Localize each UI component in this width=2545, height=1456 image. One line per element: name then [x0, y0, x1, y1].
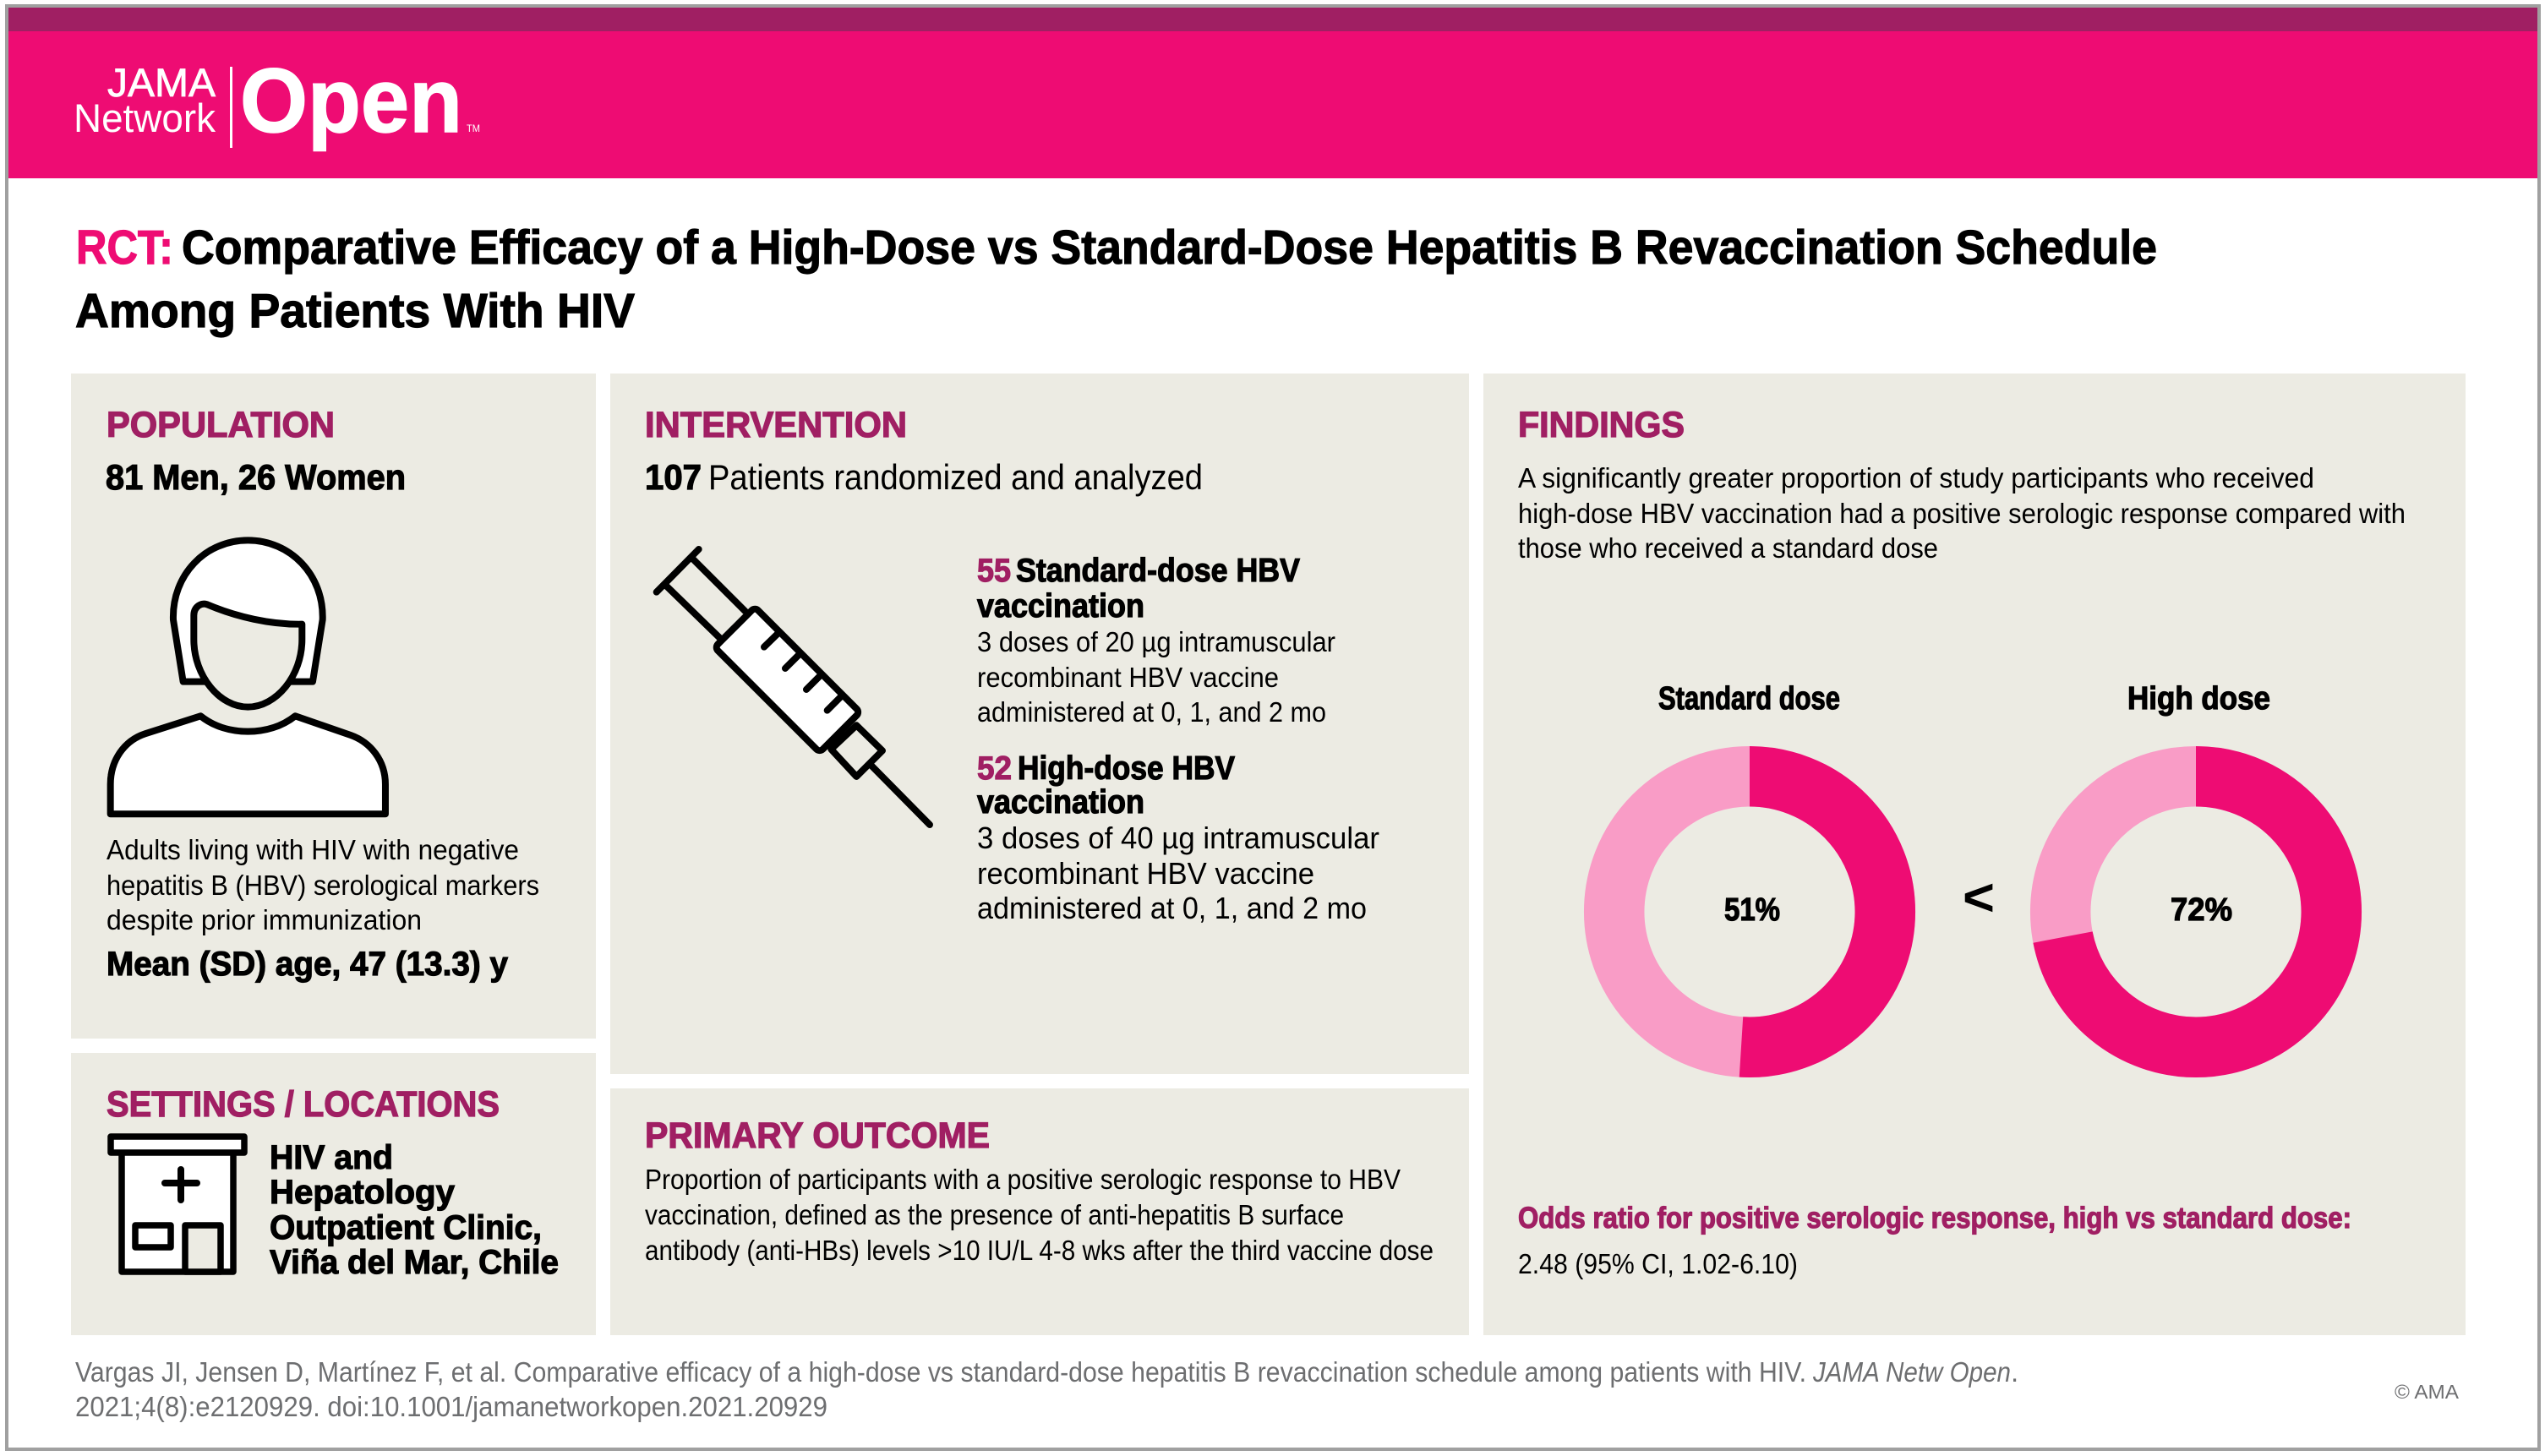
outcome description	[645, 1164, 1434, 1266]
panel: intervention	[610, 374, 1469, 1074]
panel: settings / locations	[71, 1053, 596, 1335]
heading: intervention: INTERVENTION	[645, 405, 907, 445]
arm: standard dose: vaccination	[977, 588, 1144, 624]
outcome description: Proportion of participants with a positive serologic response to HBV	[645, 1164, 1401, 1195]
donut chart: standard dose 51%	[1614, 777, 1885, 1047]
logo: JAMA Network Open: TM	[467, 123, 480, 134]
citation: 2021;4(8):e2120929. doi:10.1001/jamanetworkopen.2021.20929	[75, 1391, 827, 1422]
population description	[106, 834, 539, 935]
population description: despite prior immunization	[106, 904, 422, 935]
men and women count: 81 Men, 26 Women	[106, 457, 406, 497]
heading: findings: FINDINGS	[1518, 405, 1685, 445]
arm: standard dose	[977, 553, 1335, 728]
donut chart: high dose 72%	[2061, 777, 2331, 1047]
odds ratio value: 2.48 (95% CI, 1.02-6.10)	[1518, 1248, 1798, 1279]
arm: high dose: 52	[977, 750, 1012, 787]
title: RCT:	[76, 221, 173, 275]
population description: hepatitis B (HBV) serological markers	[106, 870, 539, 901]
icon: clinic building	[111, 1137, 244, 1272]
label: high dose: High dose	[2127, 681, 2270, 717]
arm: high dose: 3 doses of 40 µg intramuscular	[977, 821, 1379, 855]
clinic location text: HIV and	[270, 1139, 393, 1176]
findings summary: those who received a standard dose	[1518, 532, 1938, 564]
copyright: © AMA	[2395, 1381, 2460, 1403]
arm: high dose	[977, 750, 1379, 925]
randomized count: Patients randomized and analyzed	[708, 457, 1203, 497]
panel: findings	[1483, 374, 2466, 1335]
arm: standard dose: 55	[977, 553, 1011, 589]
logo: JAMA Network Open	[74, 49, 480, 151]
heading: settings: SETTINGS / LOCATIONS	[106, 1084, 500, 1125]
arm: high dose: High-dose HBV	[1018, 750, 1235, 787]
population description: Adults living with HIV with negative	[106, 834, 519, 865]
heading: primary outcome: PRIMARY OUTCOME	[645, 1115, 990, 1156]
citation	[75, 1356, 2018, 1422]
citation: Vargas JI, Jensen D, Martínez F, et al. Comparative efficacy of a high-dose vs standard-dose hepatitis B revaccination schedule among patients with HIV.	[75, 1356, 1806, 1388]
logo: JAMA Network Open: JAMA	[107, 60, 216, 105]
title: Comparative Efficacy of a High-Dose vs Standard-Dose Hepatitis B Revaccination Schedule	[182, 221, 2157, 275]
clinic location text: Hepatology	[270, 1174, 456, 1211]
label: standard dose: Standard dose	[1658, 681, 1840, 717]
comparison sign: <	[1963, 869, 1995, 927]
citation: JAMA Netw Open	[1812, 1356, 2011, 1388]
findings summary: A significantly greater proportion of study participants who received	[1518, 462, 2314, 494]
header banner	[8, 8, 2537, 178]
findings summary	[1518, 462, 2406, 564]
arm: high dose: recombinant HBV vaccine	[977, 856, 1314, 891]
logo: JAMA Network Open: Open	[240, 49, 462, 151]
logo: JAMA Network Open: Network	[74, 95, 216, 140]
heading: population: POPULATION	[106, 405, 335, 445]
arm: standard dose: recombinant HBV vaccine	[977, 662, 1279, 693]
mean age: Mean (SD) age, 47 (13.3) y	[106, 946, 509, 983]
icon: syringe	[657, 549, 930, 825]
arm: standard dose: Standard-dose HBV	[1016, 553, 1300, 589]
panel: primary outcome	[610, 1088, 1469, 1335]
clinic location text	[270, 1139, 559, 1281]
donut chart: standard dose 51%: 51%	[1724, 892, 1780, 928]
odds ratio label: Odds ratio for positive serologic response, high vs standard dose:	[1518, 1202, 2351, 1235]
arm: high dose: administered at 0, 1, and 2 mo	[977, 891, 1367, 925]
clinic location text: Viña del Mar, Chile	[270, 1244, 559, 1281]
outcome description: vaccination, defined as the presence of anti-hepatitis B surface	[645, 1199, 1344, 1230]
findings summary: high-dose HBV vaccination had a positive serologic response compared with	[1518, 498, 2406, 529]
arm: standard dose: administered at 0, 1, and 2 mo	[977, 696, 1326, 728]
citation: .	[2011, 1356, 2018, 1388]
donut chart: high dose 72%: 72%	[2171, 892, 2232, 928]
icon: person	[111, 540, 385, 814]
panel: population	[71, 374, 596, 1039]
arm: standard dose: 3 doses of 20 µg intramuscular	[977, 626, 1335, 657]
arm: high dose: vaccination	[977, 784, 1144, 821]
clinic location text: Outpatient Clinic,	[270, 1209, 542, 1246]
randomized count: 107	[645, 457, 702, 497]
title: Among Patients With HIV	[75, 284, 635, 338]
outcome description: antibody (anti-HBs) levels >10 IU/L 4-8 wks after the third vaccine dose	[645, 1235, 1434, 1266]
title	[75, 221, 2157, 338]
